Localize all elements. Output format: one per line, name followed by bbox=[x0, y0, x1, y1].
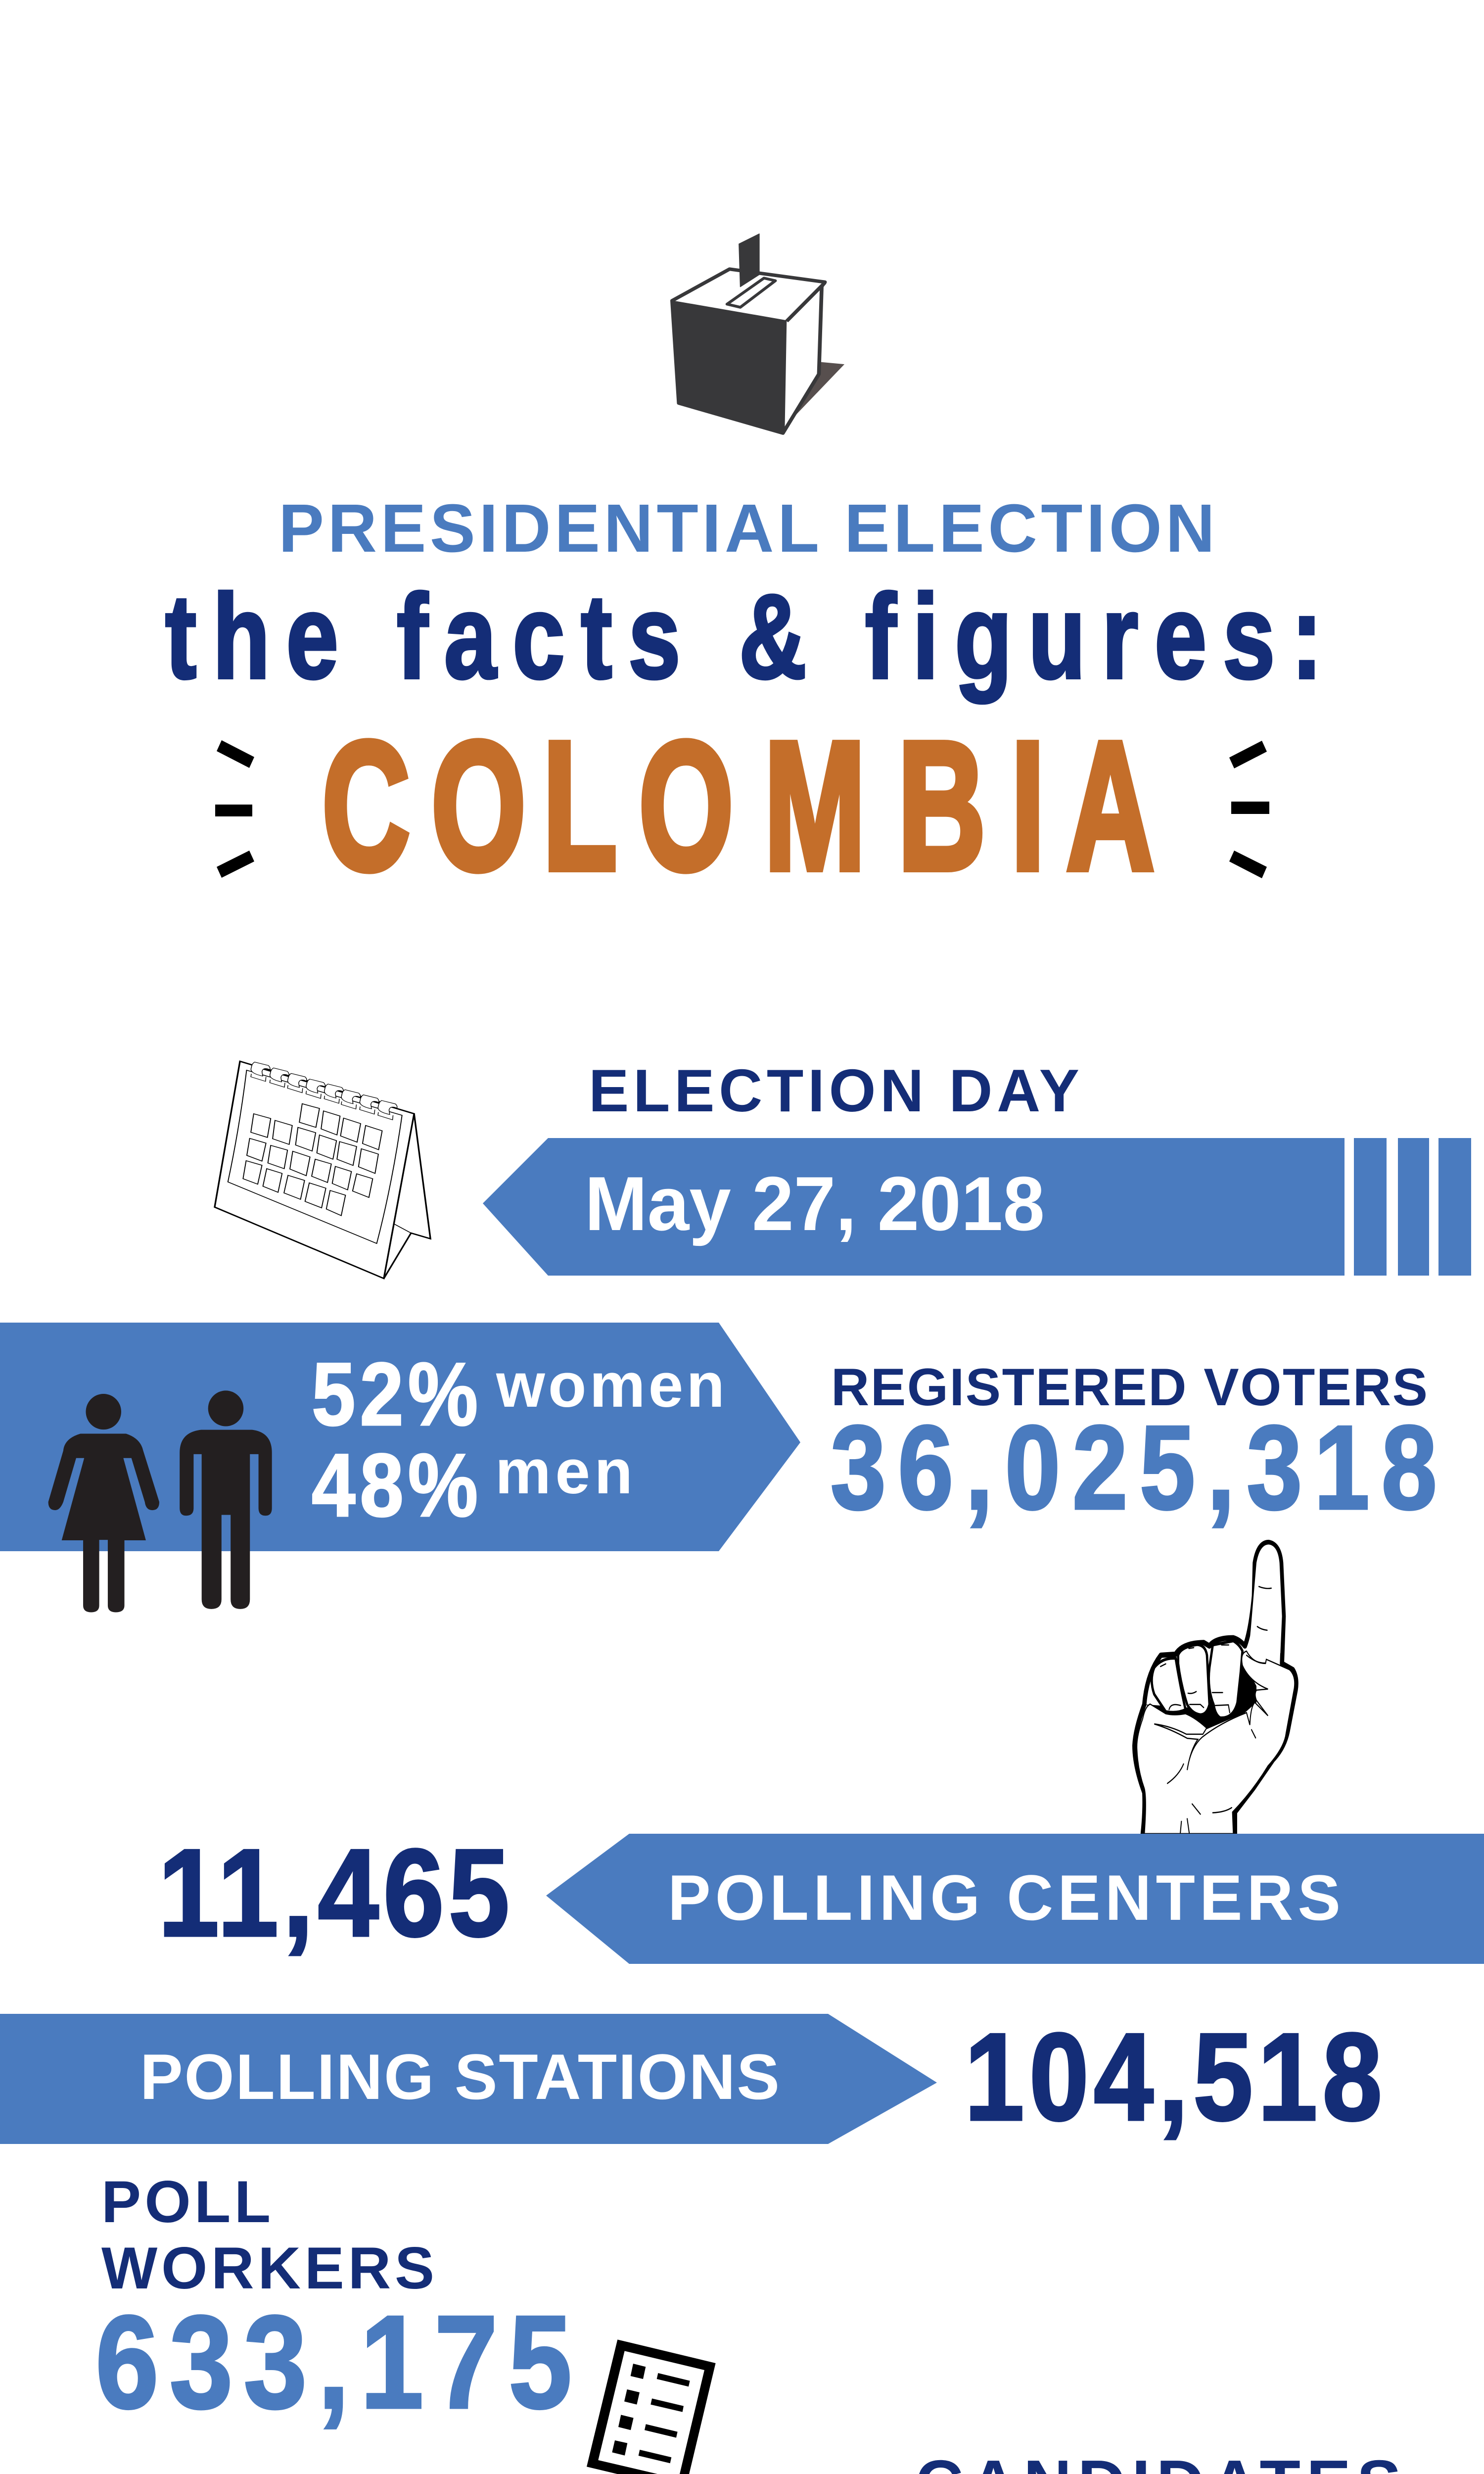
polling centers label: POLLING CENTERS bbox=[668, 1861, 1341, 1934]
number: poll workers: 633,175 bbox=[95, 2288, 583, 2436]
icon: woman and man figures bbox=[48, 1390, 272, 1612]
heading: poll workers bbox=[101, 2169, 434, 2301]
men label: men bbox=[495, 1436, 633, 1507]
heading: Colombia: COLOMBIA bbox=[322, 704, 1154, 908]
heading: presidential election: PRESIDENTIAL ELECTION bbox=[278, 490, 1215, 567]
panel: polling stations arrow bbox=[0, 2014, 937, 2144]
women share: 52% bbox=[312, 1344, 482, 1444]
women label: women bbox=[496, 1350, 725, 1420]
men share: 48% bbox=[312, 1435, 482, 1535]
panel: election date arrow bbox=[483, 1138, 1471, 1276]
icon: ballot box bbox=[672, 234, 844, 433]
icon: left burst ticks bbox=[215, 740, 254, 878]
number: polling centers: 11,465 bbox=[158, 1824, 514, 1962]
heading: election day: ELECTION DAY bbox=[589, 1057, 1079, 1124]
heading: poll workers: WORKERS bbox=[101, 2235, 434, 2301]
panel: gender split arrow bbox=[0, 1323, 800, 1551]
panel: polling centers arrow bbox=[546, 1834, 1484, 1964]
number: polling stations: 104,518 bbox=[965, 2008, 1387, 2146]
heading: registered voters: REGISTERED VOTERS bbox=[831, 1357, 1428, 1417]
polling stations label: POLLING STATIONS bbox=[140, 2041, 780, 2113]
date text: May 27, 2018 bbox=[585, 1161, 1045, 1246]
icon: hand pointing up bbox=[1134, 1542, 1296, 1834]
icon: desk calendar bbox=[215, 1061, 430, 1279]
icon: checklist bbox=[587, 2339, 716, 2474]
heading: poll workers: POLL bbox=[101, 2169, 271, 2235]
icon: right burst ticks bbox=[1229, 741, 1269, 878]
